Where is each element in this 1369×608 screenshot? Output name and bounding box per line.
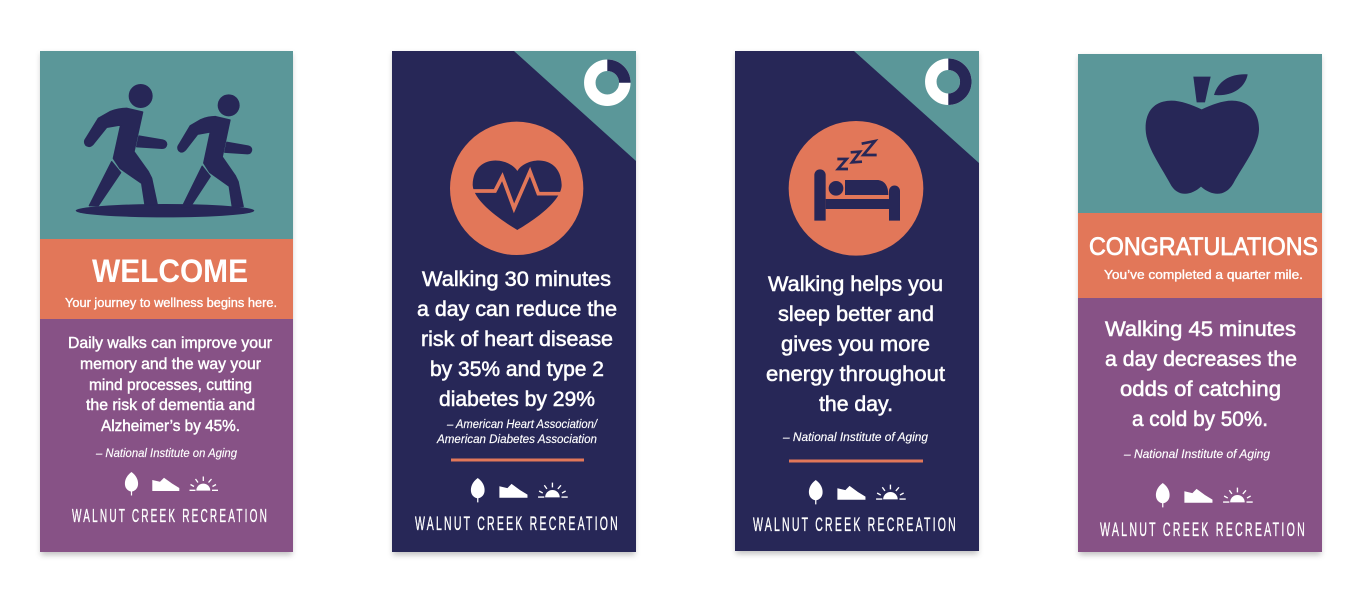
text block: heart fact: a day can reduce the [417, 298, 617, 321]
text block: sleep fact: Walking helps you [768, 273, 943, 296]
icon: heart with pulse [450, 122, 583, 255]
text block: sleep fact: energy throughout [766, 363, 945, 386]
icon: progress ring half [931, 64, 966, 99]
source: National Institute on Aging: – National Institute on Aging [95, 446, 237, 460]
text block: dementia fact: mind processes, cutting [89, 377, 252, 394]
text block: sleep fact: gives you more [781, 333, 930, 356]
subheading: congratulations: You’ve completed a quarter mile. [1104, 267, 1303, 282]
text block: dementia fact: memory and the way your [80, 356, 262, 373]
panel: welcome [40, 51, 293, 555]
panel: sleep [735, 51, 979, 554]
icons: leaf, shoe, sun [125, 472, 218, 496]
heading: welcome: WELCOME [92, 253, 248, 289]
text block: dementia fact: the risk of dementia and [86, 397, 255, 414]
subheading: welcome: Your journey to wellness begins here. [65, 295, 277, 310]
panel: congratulations [1078, 54, 1322, 555]
source: heart associations: American Diabetes Association [436, 434, 597, 446]
icons: leaf, shoe, sun [1156, 483, 1253, 507]
icons: leaf, shoe, sun [471, 478, 568, 502]
panel: heart disease [392, 51, 636, 555]
logo: Walnut Creek Recreation: WALNUT CREEK RECREATION [72, 505, 269, 526]
text block: cold fact: a day decreases the [1105, 348, 1297, 371]
text block: dementia fact [68, 335, 273, 435]
heading: congratulations: CONGRATULATIONS [1089, 233, 1318, 261]
text block: heart fact: by 35% and type 2 [430, 358, 604, 381]
icons: leaf, shoe, sun [809, 480, 906, 504]
text block: cold fact: a cold by 50%. [1132, 408, 1268, 431]
icon: progress ring quarter [590, 65, 625, 100]
logo: Walnut Creek Recreation: WALNUT CREEK RECREATION [415, 514, 620, 535]
text block: cold fact: Walking 45 minutes [1105, 318, 1296, 341]
text block: sleep fact: sleep better and [778, 303, 934, 326]
text block: dementia fact: Alzheimer’s by 45%. [101, 418, 240, 435]
source: heart associations: – American Heart Association/ [446, 419, 599, 431]
source: heart associations [436, 419, 599, 446]
icon: sleeping in bed [789, 121, 923, 256]
logo: Walnut Creek Recreation: WALNUT CREEK RECREATION [753, 515, 958, 536]
text block: heart fact [417, 268, 617, 411]
text block: sleep fact [766, 273, 945, 416]
text block: sleep fact: the day. [819, 393, 893, 416]
icon: two walkers [76, 84, 254, 217]
source: National Institute of Aging: – National Institute of Aging [782, 430, 928, 444]
text block: heart fact: diabetes by 29% [439, 388, 595, 411]
text block: heart fact: Walking 30 minutes [422, 268, 611, 291]
text block: cold fact [1105, 318, 1297, 431]
text block: cold fact: odds of catching [1120, 378, 1281, 401]
text block: heart fact: risk of heart disease [421, 328, 613, 351]
source: National Institute of Aging: – National Institute of Aging [1123, 447, 1270, 461]
icon: apple [1146, 74, 1259, 194]
text block: dementia fact: Daily walks can improve your [68, 335, 273, 352]
